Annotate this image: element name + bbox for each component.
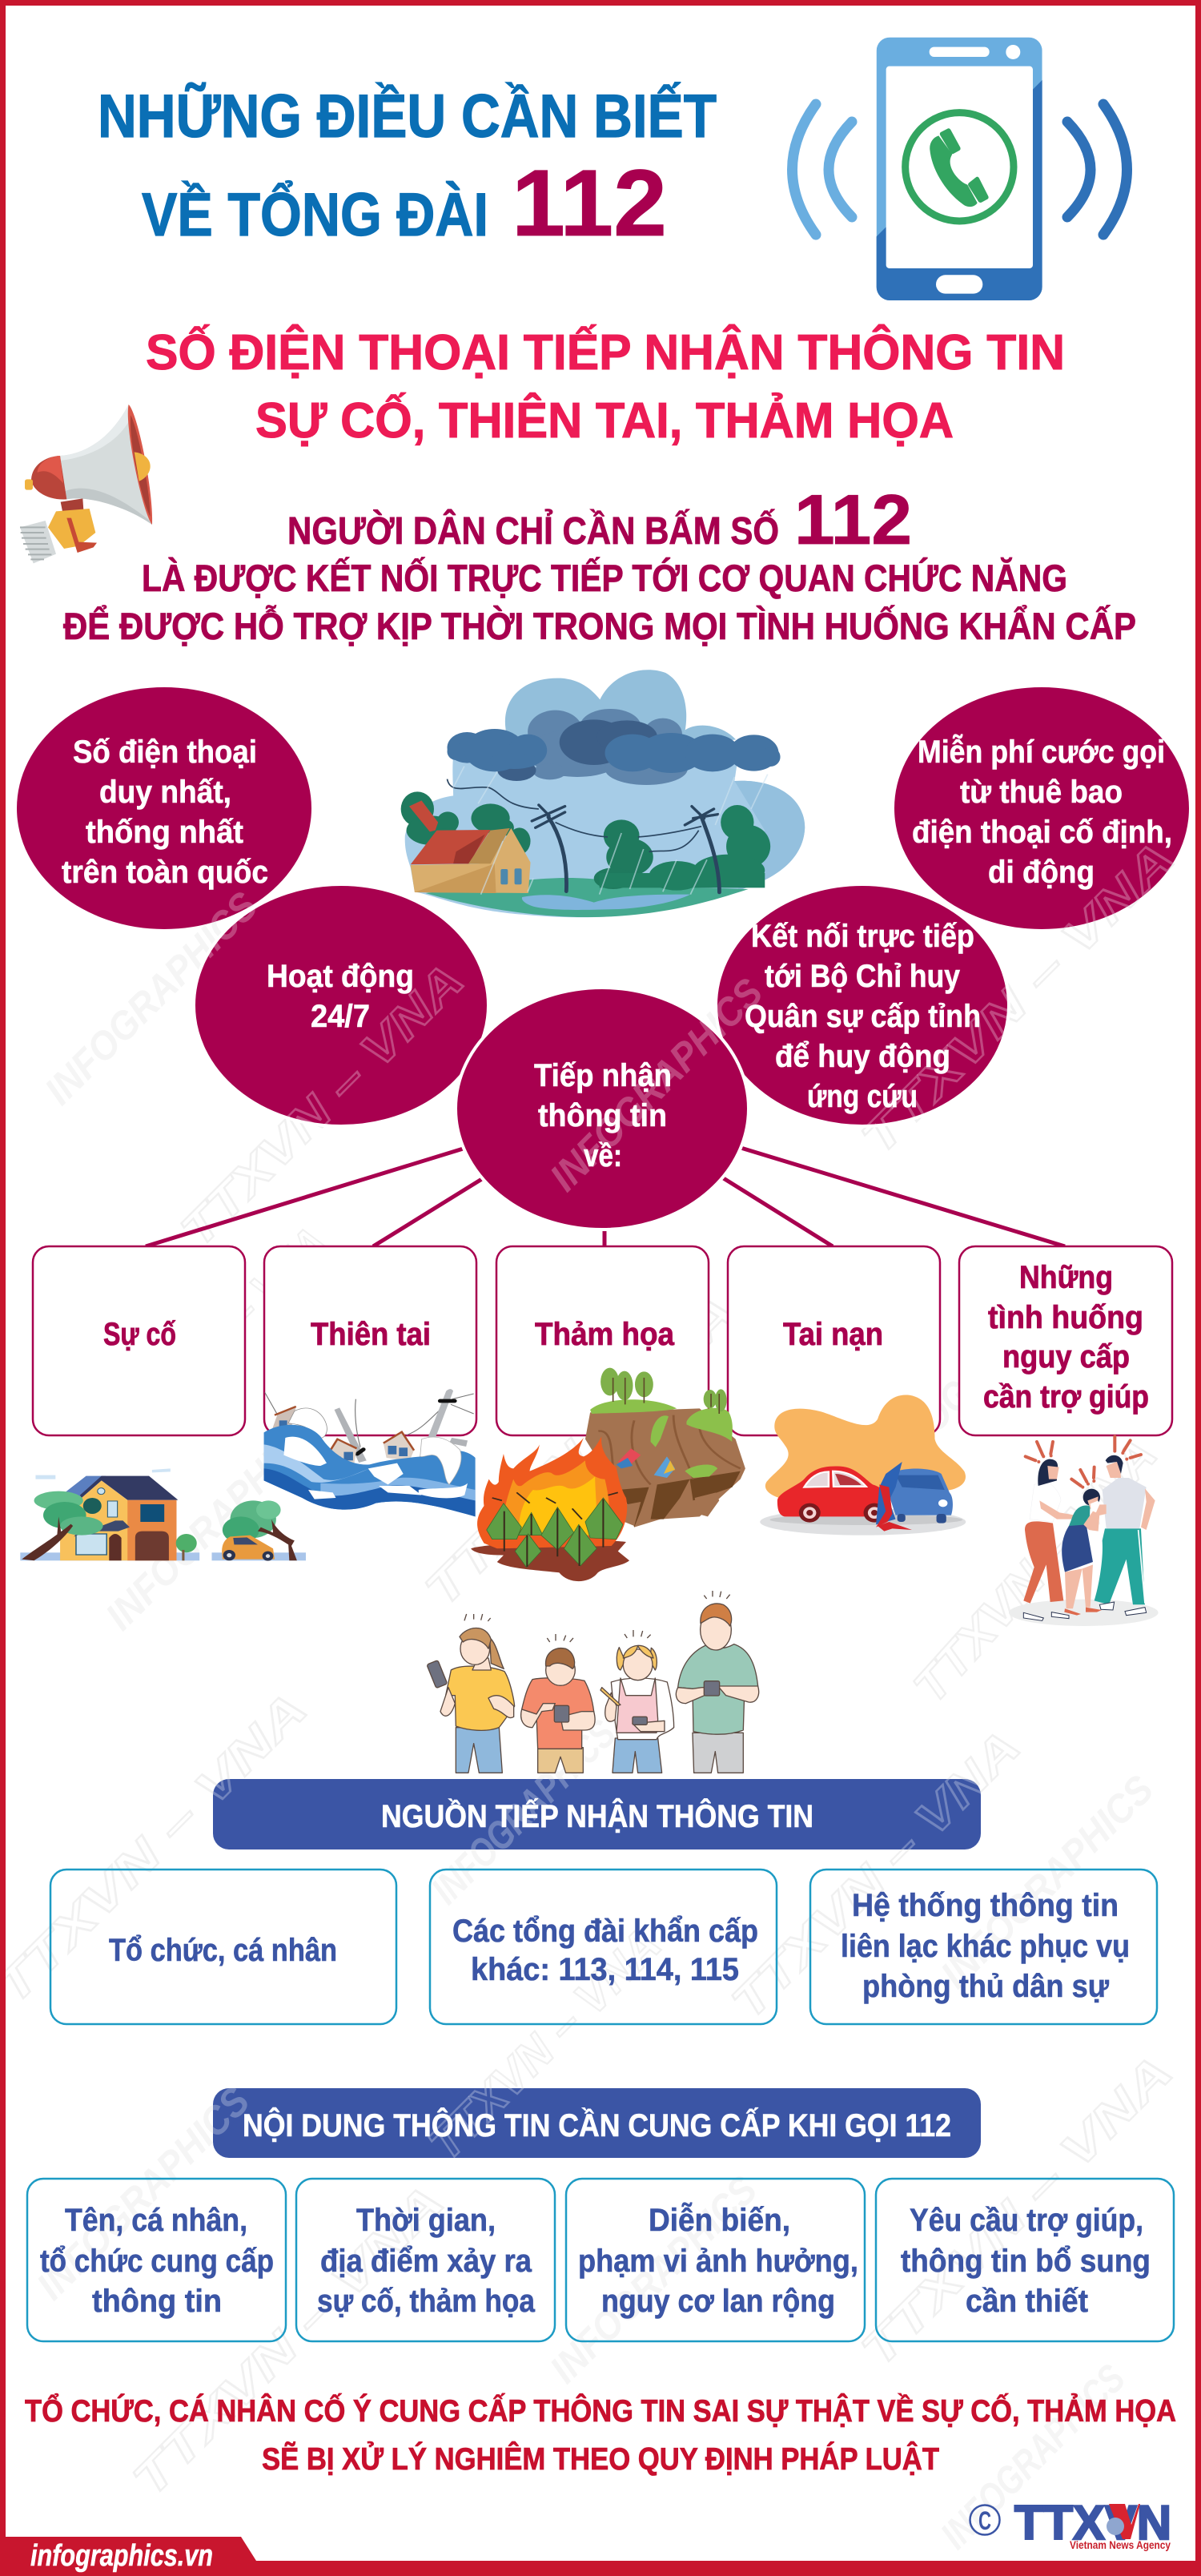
legal warning [25,2393,1176,2477]
illustration: flood waves [264,1389,476,1516]
watermark layer: TTXVN – VNA [851,831,1184,1165]
connector lines [146,1147,1065,1246]
box: accident [728,1246,940,1435]
panel: free of charge: Miễn phí cước gọi [918,733,1165,770]
box: organisations and individuals: Tổ chức, cá nhân [109,1933,337,1968]
box: developments: Diễn biến, [649,2201,790,2238]
box: critical situations: cần trợ giúp [983,1379,1149,1415]
box: developments: phạm vi ảnh hưởng, [578,2244,858,2279]
panel: free of charge [894,687,1189,929]
box: other emergency lines: Các tổng đài khẩn cấp [452,1914,758,1949]
box: developments [566,2179,865,2341]
figure: man in green [676,1604,759,1773]
watermark layer: INFOGRAPHICS [28,2079,258,2308]
figure: woman in yellow [427,1628,515,1773]
footer tab: website: infographics.vn [30,2539,213,2573]
text block: call 112: 112 [794,480,912,559]
box: name: thông tin [92,2284,222,2319]
panel: central receiving circle: về: [584,1138,622,1173]
title: NHỮNG ĐIỀU CẦN BIẾT [98,83,717,151]
illustration: storm over house [401,670,805,917]
watermark over solid shapes: TTXVN – VNA [171,954,474,1257]
panel: military command connection: để huy động [775,1039,950,1074]
illustration: family in distress [1009,1436,1159,1626]
box: civil defence systems: Hệ thống thông tin [852,1888,1119,1923]
figure: boy in orange [521,1648,595,1773]
box: civil defence systems: liên lạc khác phục vụ [841,1929,1130,1964]
box: critical situations [959,1246,1172,1435]
watermark layer: TTXVN – VNA [415,1286,746,1616]
watermark over solid shapes: INFOGRAPHICS [541,970,771,1200]
watermark layer [0,831,1184,2558]
box: critical situations: nguy cấp [1002,1339,1130,1375]
box: name [27,2179,286,2341]
panel: central receiving circle [456,988,749,1230]
panel: 24/7 operation: 24/7 [311,999,370,1034]
illustration: people reading phones [427,1591,759,1773]
title: VỀ TỔNG ĐÀI [142,181,488,249]
icon: megaphone [20,405,152,563]
watermark over solid shapes: TTXVN – VNA [721,1721,1030,2029]
legal warning: SẼ BỊ XỬ LÝ NGHIÊM THEO QUY ĐỊNH PHÁP LUẬT [262,2441,939,2477]
watermark layer: INFOGRAPHICS [541,2167,765,2392]
watermark layer: TTXVN – VNA [419,1918,671,2170]
illustration: car crash [760,1395,966,1536]
box: catastrophe [496,1246,709,1435]
banner: information sources: NGUỒN TIẾP NHẬN THÔNG TIN [381,1797,813,1834]
box: critical situations: tình huống [988,1300,1143,1335]
watermark layer: TTXVN – VNA [721,1721,1030,2029]
watermark layer: TTXVN – VNA [903,1428,1167,1713]
box: critical situations: Những [1019,1260,1113,1295]
figure: girl in pink [600,1645,674,1773]
panel: 24/7 operation: Hoạt động [267,959,414,994]
footer tab: website [0,2537,1201,2576]
watermark layer: INFOGRAPHICS [423,1711,625,1913]
box: catastrophe: Thảm họa [535,1317,675,1352]
logo: copyright and TTXVN: TTXVN [1014,2496,1171,2550]
watermark layer: INFOGRAPHICS [36,883,266,1113]
box: natural disaster: Thiên tai [311,1317,431,1352]
logo: copyright and TTXVN: C [978,2506,991,2535]
panel: military command connection [716,884,1009,1126]
box: civil defence systems [810,1870,1157,2024]
watermark over solid shapes: INFOGRAPHICS [28,2079,258,2308]
panel: free of charge: di động [988,855,1095,890]
panel: military command connection: tới Bộ Chỉ huy [765,959,961,994]
banner: information to provide [213,2088,981,2158]
box: other emergency lines [430,1870,777,2024]
box: incident: Sự cố [103,1317,176,1352]
text block: call 112: LÀ ĐƯỢC KẾT NỐI TRỰC TIẾP TỚI CƠ QUAN CHỨC NĂNG [142,557,1067,599]
box: developments: nguy cơ lan rộng [601,2284,835,2319]
subtitle: red heading [146,325,1065,449]
watermark layer: TTXVN – VNA [123,2176,454,2506]
panel: military command connection: ứng cứu [807,1079,918,1114]
watermark over solid shapes: TTXVN – VNA [851,831,1184,1165]
icon: ringing phone [793,38,1127,302]
panel: central receiving circle: thông tin [538,1098,667,1133]
watermark over solid shapes: INFOGRAPHICS [423,1711,625,1913]
watermark layer: TTXVN – VNA [114,1218,339,1441]
box: assistance request [876,2179,1174,2341]
panel: single nationwide number: Số điện thoại [73,735,257,770]
panel: military command connection: Kết nối trực tiếp [751,919,974,954]
watermark layer: INFOGRAPHICS [932,1767,1162,1997]
panel: central receiving circle: Tiếp nhận [534,1058,672,1093]
box: other emergency lines: khác: 113, 114, 115 [471,1952,739,1987]
illustration: house with fallen trees [20,1468,306,1561]
box: time and place: Thời gian, [356,2203,496,2238]
box: name: Tên, cá nhân, [65,2203,247,2238]
watermark layer: TTXVN – VNA [171,954,474,1257]
panel: single nationwide number: thống nhất [86,815,243,850]
box: time and place: địa điểm xảy ra [320,2244,532,2279]
watermark over solid shapes [208,846,1173,2158]
banner: information sources [213,1779,981,1849]
text block: call 112: NGƯỜI DÂN CHỈ CẦN BẤM SỐ [287,509,779,553]
subtitle: red heading: SỰ CỐ, THIÊN TAI, THẢM HỌA [255,393,954,449]
panel: single nationwide number: duy nhất, [99,775,231,810]
title [98,83,717,256]
box: time and place: sự cố, thảm họa [317,2284,536,2319]
panel: military command connection: Quân sự cấp tỉnh [745,999,981,1034]
watermark layer: INFOGRAPHICS [871,1262,1090,1480]
illustration: landslide [585,1368,745,1527]
banner: information to provide: NỘI DUNG THÔNG TIN CẦN CUNG CẤP KHI GỌI 112 [243,2107,951,2143]
box: name: tổ chức cung cấp [40,2244,274,2279]
watermark over solid shapes: TTXVN – VNA [419,1918,671,2170]
watermark layer: TTXVN – VNA [851,2046,1183,2377]
watermark over solid shapes: INFOGRAPHICS [36,883,266,1113]
subtitle: red heading: SỐ ĐIỆN THOẠI TIẾP NHẬN THÔNG TIN [146,325,1065,380]
box: accident: Tai nạn [783,1317,883,1352]
box: assistance request: Yêu cầu trợ giúp, [910,2203,1143,2238]
panel: 24/7 operation [194,884,488,1126]
box: incident [33,1246,245,1435]
panel: free of charge: điện thoại cố định, [912,815,1172,850]
box: civil defence systems: phòng thủ dân sự [862,1969,1109,2004]
illustration: forest fire [471,1436,629,1581]
box: organisations and individuals [50,1870,396,2024]
box: assistance request: cần thiết [966,2284,1088,2319]
logo: copyright and TTXVN: Vietnam News Agency [1070,2538,1171,2551]
watermark layer: INFOGRAPHICS [97,1409,327,1639]
panel: single nationwide number [17,687,311,929]
watermark layer: INFOGRAPHICS [932,2356,1134,2558]
title: 112 [512,151,667,256]
box: natural disaster [264,1246,476,1435]
text block: call 112 [63,480,1136,647]
panel: free of charge: từ thuê bao [960,775,1123,810]
panel: single nationwide number: trên toàn quốc [62,855,268,890]
watermark layer: INFOGRAPHICS [541,970,771,1200]
box: assistance request: thông tin bổ sung [901,2244,1151,2279]
box: time and place [296,2179,555,2341]
